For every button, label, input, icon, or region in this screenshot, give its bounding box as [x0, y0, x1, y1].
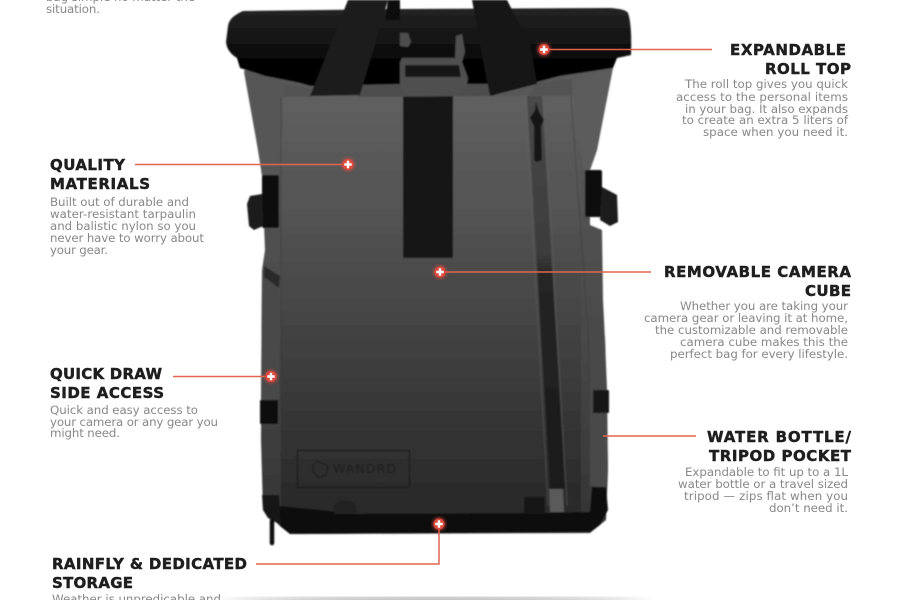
leader line: roll top: [544, 48, 712, 50]
lower strap right: [593, 390, 609, 413]
body: roll top: [676, 77, 849, 139]
body: quality materials: and balistic nylon so you: [50, 219, 196, 233]
callout: water bottle tripod pocket: [603, 428, 852, 515]
marker: rainfly: [432, 517, 446, 531]
roll top fold under left: [283, 84, 312, 97]
left flap: [244, 72, 283, 176]
heading: camera cube: REMOVABLE CAMERA: [664, 263, 851, 281]
strap dark top: [385, 0, 400, 20]
leader line: quick draw: [173, 376, 271, 378]
body: roll top: space when you need it.: [703, 125, 848, 139]
side strap right: [585, 170, 618, 226]
zipper seams: [525, 96, 567, 505]
right shoulder strap: [472, 0, 537, 96]
gusset shadow lines: [281, 96, 590, 505]
heading: rainfly: STORAGE: [52, 574, 133, 592]
heading: quick draw: QUICK DRAW: [50, 365, 162, 383]
central webbing strap: [403, 96, 453, 258]
heading: roll top: [730, 41, 851, 78]
front panel: [281, 96, 581, 516]
zipper channel: [527, 96, 565, 489]
logo patch: [298, 450, 410, 488]
lower strap left: [260, 400, 278, 424]
callout: quick draw side access: [50, 365, 278, 440]
left pocket: [261, 270, 279, 400]
callout: top-left cropped text: situation.: [46, 2, 100, 16]
heading: roll top: ROLL TOP: [765, 60, 851, 78]
body: water bottle: Expandable to fit up to a 1L: [685, 465, 848, 479]
heading: camera cube: CUBE: [805, 282, 851, 300]
right flap: [572, 68, 613, 170]
heading: camera cube: [664, 263, 851, 300]
heading: quality materials: [50, 156, 150, 193]
callout: top-left cropped text: [46, 0, 195, 16]
right side pocket: [590, 336, 608, 488]
backpack illustration: [226, 0, 631, 543]
heading: rainfly: [52, 555, 247, 592]
roll top: [226, 8, 631, 86]
leader line: quality materials: [135, 164, 348, 166]
leader line: water bottle: [603, 435, 696, 437]
marker: camera cube: [433, 265, 447, 279]
left shoulder strap: [310, 0, 388, 96]
bag body: [244, 66, 613, 534]
body: camera cube: camera gear or leaving it at home,: [644, 311, 848, 325]
body: quick draw: [50, 403, 218, 440]
heading: water bottle: WATER BOTTLE/: [707, 428, 852, 446]
callout: quality materials: [50, 156, 355, 257]
body: roll top: in your bag. It also expands: [685, 102, 848, 116]
body: roll top: to create an extra 5 liters of: [682, 113, 849, 127]
heading: quick draw: SIDE ACCESS: [50, 384, 164, 402]
base tab right: [524, 497, 545, 514]
body: quality materials: Built out of durable and: [50, 195, 189, 209]
heading: quick draw: [50, 365, 164, 402]
body: quick draw: your camera or any gear you: [50, 415, 218, 429]
base tab left: [334, 500, 357, 514]
base corner left: [262, 495, 281, 525]
body: quality materials: your gear.: [50, 243, 108, 257]
heading: water bottle: TRIPOD POCKET: [709, 447, 852, 465]
body: roll top: The roll top gives you quick: [684, 77, 848, 91]
side strap left: [247, 175, 279, 230]
logo patch: WANDRD: [333, 461, 396, 476]
zipper pull: [530, 102, 544, 162]
body: camera cube: [644, 299, 848, 361]
body: water bottle: don’t need it.: [769, 501, 848, 515]
body: camera cube: Whether you are taking your: [680, 299, 848, 313]
flap centre: [355, 78, 495, 97]
heading: water bottle: [707, 428, 852, 465]
callout: expandable roll top: [537, 41, 851, 139]
pocket band: [264, 266, 280, 288]
marker: quick draw: [264, 370, 278, 384]
body: camera cube: camera cube makes this the: [680, 335, 848, 349]
body: quick draw: Quick and easy access to: [50, 403, 198, 417]
roll top fold under right: [530, 79, 572, 95]
body: water bottle: tripod — zips flat when you: [684, 489, 848, 503]
body: quality materials: never have to worry about: [50, 231, 204, 245]
callout: rainfly and dedicated storage: [52, 517, 446, 600]
body: quality materials: [50, 195, 204, 257]
body: camera cube: the customizable and removable: [655, 323, 848, 337]
body: camera cube: perfect bag for every lifestyle.: [670, 347, 848, 361]
heading: quality materials: QUALITY: [50, 156, 126, 174]
buckle: [400, 33, 468, 95]
body: quick draw: might need.: [50, 426, 120, 440]
marker: quality materials: [341, 158, 355, 172]
zipper garage: [549, 489, 564, 512]
body: quality materials: water-resistant tarpaulin: [50, 207, 196, 221]
leader line: camera cube: [440, 271, 651, 273]
leader line: rainfly: [256, 524, 439, 564]
zip cord: [270, 521, 274, 543]
bottom base: [280, 487, 608, 534]
heading: quality materials: MATERIALS: [50, 175, 150, 193]
callout: removable camera cube: [433, 263, 851, 361]
marker: roll top: [537, 42, 551, 56]
body: water bottle: water bottle or a travel sized: [678, 477, 848, 491]
body: water bottle: [678, 465, 848, 515]
heading: rainfly: RAINFLY & DEDICATED: [52, 555, 247, 573]
body: roll top: access to the personal items: [676, 90, 848, 104]
heading: roll top: EXPANDABLE: [730, 41, 846, 59]
